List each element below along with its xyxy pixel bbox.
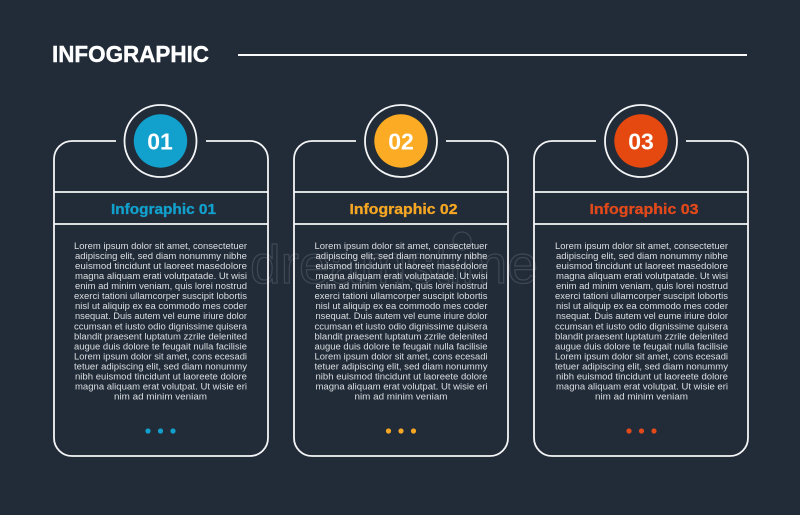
body text 02: enim ad minim veniam, quis lorei nostrud [316, 281, 488, 291]
number badge 03: 03 [628, 128, 654, 154]
body text 02: exerci tationi ullamcorper suscipit lobortis [314, 291, 488, 301]
body text 03: nim ad minim veniam [595, 392, 688, 402]
header band [534, 192, 748, 224]
body text 02: Lorem ipsum dolor sit amet, cons ecesadi [314, 352, 488, 362]
card outline [534, 141, 748, 456]
body text 01: euismod tincidunt ut laoreet masedolore [75, 261, 247, 271]
body text 01: adipiscing elit, sed diam nonummy nibhe [75, 251, 247, 261]
body text 01: magna aliquam erat volutpat. Ut wisie eri [75, 382, 247, 392]
body text 03: euismod tincidunt ut laoreet masedolore [556, 261, 728, 271]
body text 01: Lorem ipsum dolor sit amet, cons ecesadi [74, 352, 247, 362]
body text 01: tetuer adipiscing elit, sed diam nonummy [74, 362, 248, 372]
body text 01: augue duis dolore te feugait nulla facilisie [74, 342, 247, 352]
body text 03: magna aliquam erati volutpatade. Ut wisi [556, 271, 728, 281]
body text 03: exerci tationi ullamcorper suscipit lobortis [555, 291, 729, 301]
body text 02: euismod tincidunt ut laoreet masedolore [316, 261, 488, 271]
body text 03: ccumsan et iusto odio dignissime quisera [555, 322, 728, 332]
body text 02: blandit praesent luptatum zzrile delenited [314, 332, 488, 342]
body text 03: nibh euismod tincidunt ut laoreete dolore [556, 372, 728, 382]
body text 01: Lorem ipsum dolor sit amet, consectetuer [74, 241, 247, 251]
body text 01: blandit praesent luptatum zzrile delenited [74, 332, 247, 342]
header band [54, 192, 268, 224]
body text 02: adipiscing elit, sed diam nonummy nibhe [316, 251, 488, 261]
body text 03: Lorem ipsum dolor sit amet, consectetuer [555, 241, 728, 251]
body text 02: magna aliquam erat volutpat. Ut wisie eri [316, 382, 488, 392]
number badge 02 [365, 105, 437, 177]
card outline [54, 141, 268, 456]
body text 03: enim ad minim veniam, quis lorei nostrud [556, 281, 728, 291]
body text 02: nisl ut aliquip ex ea commodo mes coder [316, 301, 488, 311]
body text 02: Lorem ipsum dolor sit amet, consectetuer [314, 241, 488, 251]
body text 02: nibh euismod tincidunt ut laoreete dolore [316, 372, 488, 382]
body text 03: tetuer adipiscing elit, sed diam nonummy [555, 362, 729, 372]
dots 03 [626, 428, 657, 434]
number badge 01: 01 [147, 128, 173, 154]
heading 01: Infographic 01 [111, 201, 216, 218]
panel: card 02 [294, 105, 508, 456]
body text 01: ccumsan et iusto odio dignissime quisera [74, 322, 247, 332]
header band [294, 192, 508, 224]
panel: card 03 [534, 105, 748, 456]
body text 02: augue duis dolore te feugait nulla facilisie [314, 342, 488, 352]
heading 02: Infographic 02 [350, 201, 458, 218]
body text 01: nim ad minim veniam [114, 392, 207, 402]
body text 02: nsequat. Duis autem vel eume iriure dolor [316, 311, 488, 321]
body text 03: magna aliquam erat volutpat. Ut wisie eri [556, 382, 728, 392]
number badge 02: 02 [388, 128, 414, 154]
title rule [238, 54, 747, 56]
body text 02: magna aliquam erati volutpatade. Ut wisi [316, 271, 488, 281]
body text 03: blandit praesent luptatum zzrile delenited [555, 332, 728, 342]
body text 03: nisl ut aliquip ex ea commodo mes coder [556, 301, 728, 311]
body text 03: adipiscing elit, sed diam nonummy nibhe [556, 251, 728, 261]
body text 01: nisl ut aliquip ex ea commodo mes coder [75, 301, 247, 311]
body text 02: ccumsan et iusto odio dignissime quisera [314, 322, 488, 332]
body text 01: magna aliquam erati volutpatade. Ut wisi [75, 271, 247, 281]
body text 03 [555, 241, 729, 402]
body text 01: enim ad minim veniam, quis lorei nostrud [75, 281, 247, 291]
body text 03: augue duis dolore te feugait nulla facilisie [555, 342, 728, 352]
watermark: dreamstime [250, 235, 538, 295]
card outline [294, 141, 508, 456]
body text 01: nibh euismod tincidunt ut laoreete dolore [75, 372, 247, 382]
body text 02: nim ad minim veniam [354, 392, 448, 402]
panel: card 01 [54, 105, 268, 456]
body text 03: Lorem ipsum dolor sit amet, cons ecesadi [555, 352, 728, 362]
title: INFOGRAPHIC [52, 41, 209, 67]
number badge 03 [605, 105, 677, 177]
heading 03: Infographic 03 [590, 201, 698, 218]
body text 02 [314, 241, 488, 402]
body text 03: nsequat. Duis autem vel eume iriure dolor [556, 311, 728, 321]
number badge 01 [124, 105, 196, 177]
dots 01 [145, 428, 176, 434]
body text 01: nsequat. Duis autem vel eume iriure dolor [75, 311, 247, 321]
body text 02: tetuer adipiscing elit, sed diam nonummy [314, 362, 488, 372]
dots 02 [386, 428, 416, 434]
body text 01 [74, 241, 248, 402]
body text 01: exerci tationi ullamcorper suscipit lobortis [74, 291, 248, 301]
